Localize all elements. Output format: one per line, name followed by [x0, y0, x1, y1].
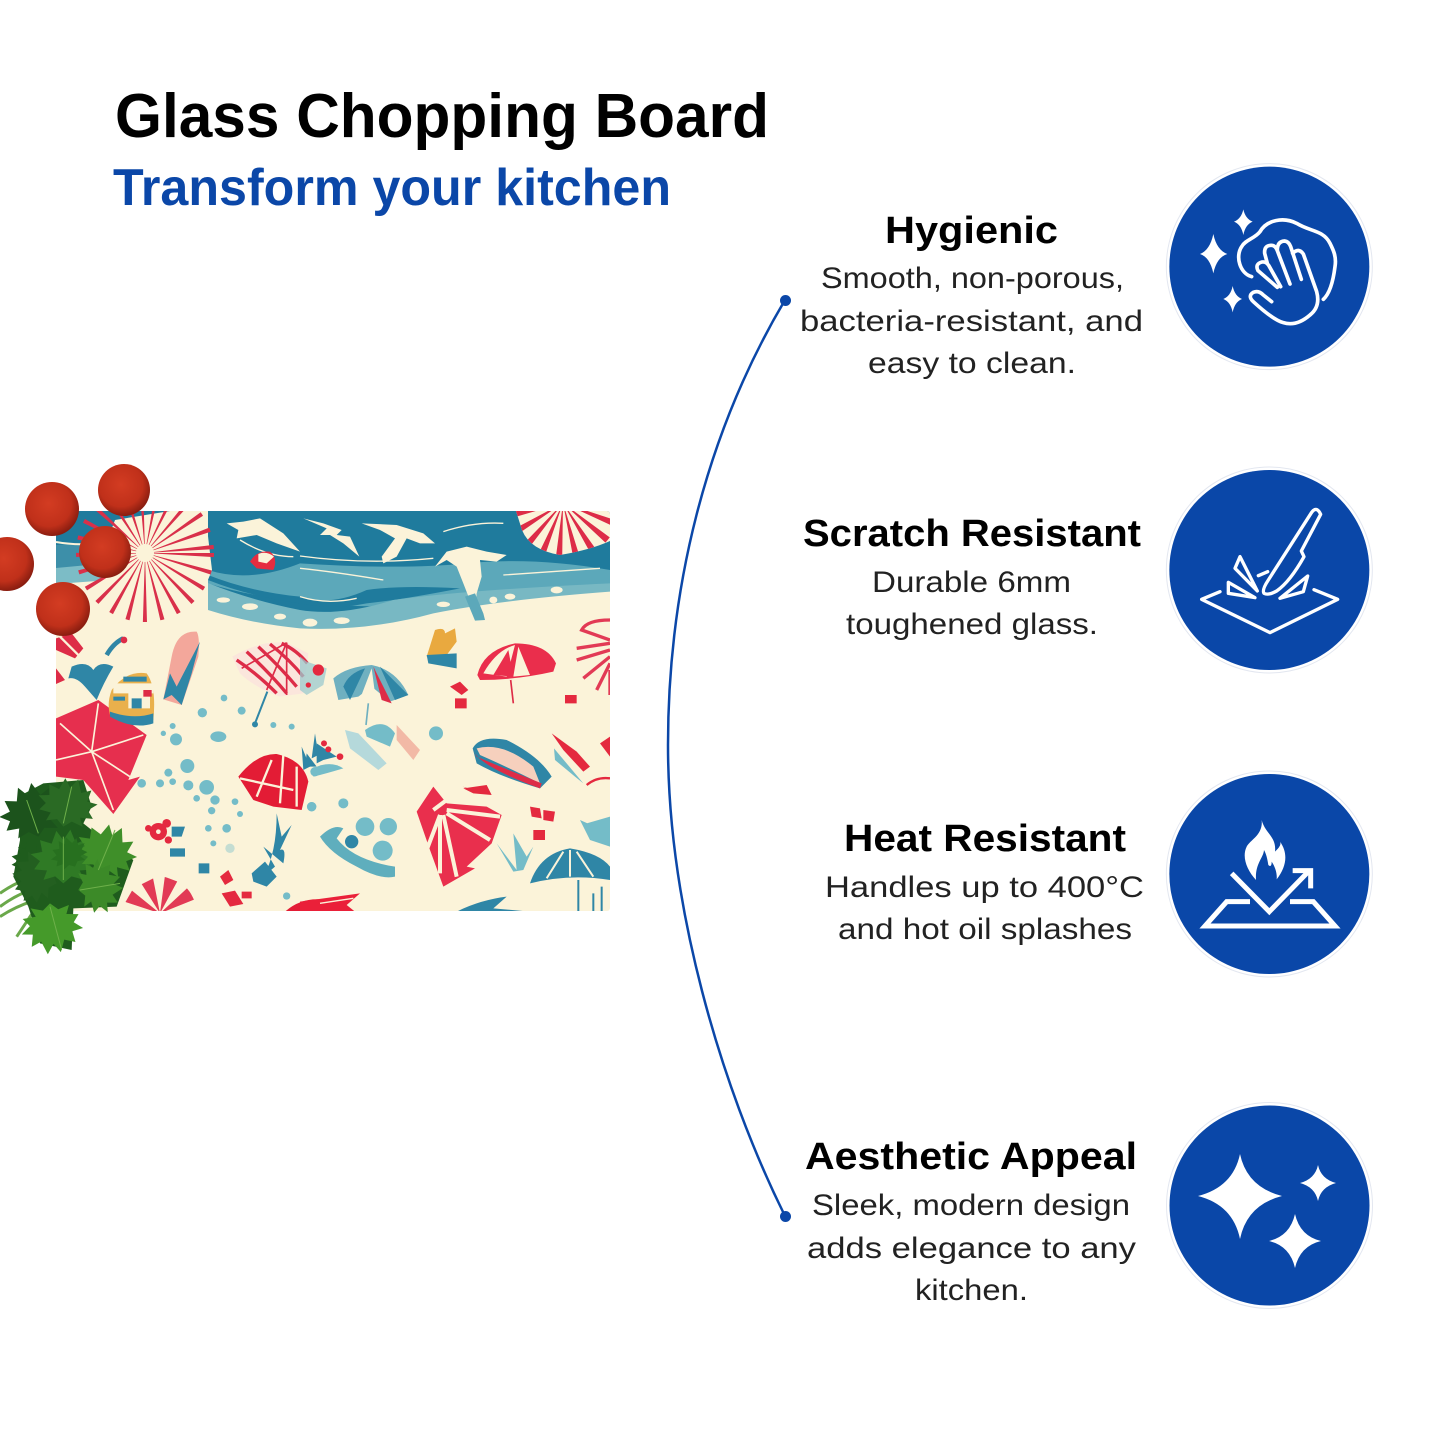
sea	[208, 511, 610, 629]
sunburst umbrella	[100, 511, 212, 622]
description: toughened glass.	[846, 608, 1098, 641]
tomato	[98, 464, 150, 516]
heading: Aesthetic Appeal	[805, 1136, 1137, 1178]
panel: aesthetic appeal	[805, 1136, 1137, 1307]
description: Handles up to 400°C	[825, 871, 1144, 904]
description: bacteria-resistant, and	[800, 305, 1143, 338]
icon: three sparkles	[1166, 1102, 1372, 1308]
heading: Hygienic	[885, 210, 1058, 252]
description	[846, 566, 1098, 641]
teal splash dots	[137, 695, 320, 900]
icon: flame over glass	[1166, 771, 1372, 977]
panel: scratch resistant	[803, 513, 1141, 641]
panel: heat resistant	[825, 818, 1144, 946]
description: Durable 6mm	[872, 566, 1071, 599]
panel: hygienic	[800, 210, 1143, 380]
seagulls	[227, 518, 507, 621]
tomato	[36, 582, 90, 636]
description: kitchen.	[915, 1274, 1028, 1307]
description	[825, 871, 1144, 946]
description	[800, 262, 1143, 380]
title: Glass Chopping Board	[115, 82, 769, 151]
heading: Scratch Resistant	[803, 513, 1141, 555]
left sea strip	[56, 511, 170, 545]
description: Smooth, non-porous,	[821, 262, 1124, 295]
striped umbrella	[232, 642, 308, 727]
tomatoes	[0, 464, 150, 636]
product image: glass chopping board with beach pattern	[56, 511, 610, 911]
top-right umbrella	[516, 511, 610, 555]
description: easy to clean.	[868, 347, 1076, 380]
description: adds elegance to any	[807, 1232, 1136, 1265]
beach ball	[250, 551, 275, 570]
heading: Heat Resistant	[844, 818, 1126, 860]
description: Sleek, modern design	[812, 1189, 1130, 1222]
description	[807, 1189, 1136, 1307]
tomato	[0, 537, 34, 591]
icon: hand wiping with sparkles	[1166, 164, 1372, 370]
icon: knife scratching glass	[1166, 467, 1372, 673]
tomato	[25, 482, 79, 536]
description: and hot oil splashes	[838, 913, 1132, 946]
parsley	[0, 773, 145, 956]
right scene: umbrellas, boat, sail, flowers	[300, 617, 610, 912]
left scene: umbrellas, bag, surfboard, flowers	[56, 632, 320, 932]
curved connector with end dots	[668, 295, 791, 1222]
subtitle: Transform your kitchen	[113, 159, 671, 217]
tomato	[79, 526, 131, 578]
